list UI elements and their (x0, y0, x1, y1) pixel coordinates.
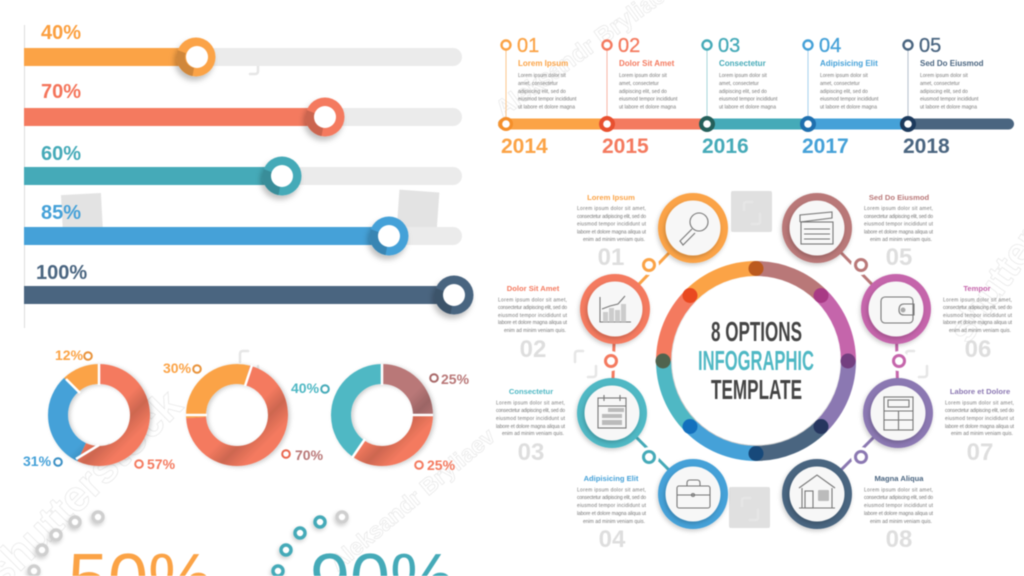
milestone 2018: 2018 (903, 135, 950, 158)
option 5: Sed Do Eiusmod (869, 193, 930, 202)
option 2: labore et dolore magna aliqua ut (498, 320, 568, 326)
dotted gauge 90% (273, 512, 454, 576)
milestone 2014: eiusmod tempor incididunt (518, 96, 577, 102)
8 options diagram (496, 193, 1015, 553)
option 7: consectetur adipiscing elit, sed do (945, 408, 1014, 414)
milestone 2015: ut labore et dolore magna (619, 104, 676, 110)
milestone 2015: Dolor Sit Amet (619, 59, 675, 68)
option 5: Lorem ipsum dolor sit amet, (864, 206, 933, 212)
donut 2 (163, 357, 324, 473)
milestone 2018: adipiscing elit, sed do (920, 89, 968, 95)
option 3: labore et dolore magna aliqua ut (496, 424, 566, 430)
milestone 2015: eiusmod tempor incididunt (619, 96, 678, 102)
milestone 2015: 2015 (602, 135, 649, 158)
option 2 (498, 274, 650, 363)
option 8: 08 (886, 526, 912, 553)
milestone 2015: 02 (618, 35, 640, 57)
icon: clapperboard (782, 193, 852, 263)
dotted gauge 50% (29, 512, 212, 576)
milestone 2017 (800, 35, 879, 158)
central title (698, 316, 814, 405)
milestone 2014 (499, 35, 577, 158)
milestone 2015: adipiscing elit, sed do (619, 89, 667, 95)
timeline bar (498, 118, 1014, 130)
option 8: consectetur adipiscing elit, sed do (864, 495, 933, 501)
option 2: enim ad minim veniam quis. (504, 328, 566, 334)
bar 70%: 70% (41, 81, 81, 103)
timeline panel (498, 35, 1014, 158)
milestone 2015: Lorem ipsum dolor sit (619, 73, 667, 79)
option 6: 06 (965, 336, 991, 363)
icon: wallet (861, 274, 931, 344)
option 8: eiusmod tempor incididunt ut (864, 503, 934, 509)
donut 3: 25% (441, 371, 470, 387)
bar 70% (24, 81, 462, 136)
option 5: enim ad minim veniam quis. (870, 237, 932, 243)
watermark: Aleksandr Bryliaev (325, 423, 500, 576)
icon: house (782, 459, 852, 529)
bar 100% (24, 262, 474, 314)
milestone 2014: adipiscing elit, sed do (518, 89, 566, 95)
milestone 2016 (699, 35, 778, 158)
option 2: eiusmod tempor incididunt ut (498, 313, 568, 319)
option 4 (577, 459, 728, 553)
milestone 2016: eiusmod tempor incididunt (719, 96, 778, 102)
milestone 2014: ut labore et dolore magna (518, 104, 575, 110)
option 4: labore et dolore magna aliqua ut (577, 511, 647, 517)
option 3 (496, 378, 647, 466)
milestone 2014: amet, consectetur (518, 81, 558, 87)
option 5: consectetur adipiscing elit, sed do (864, 214, 933, 220)
milestone 2016: 2016 (702, 135, 749, 158)
milestone 2017: amet, consectetur (820, 81, 860, 87)
milestone 2018 (900, 35, 984, 158)
milestone 2018: ut labore et dolore magna (920, 104, 977, 110)
milestone 2017: Lorem ipsum dolor sit (820, 73, 868, 79)
milestone 2016: adipiscing elit, sed do (719, 89, 767, 95)
option 7: Lorem ipsum dolor sit amet, (945, 400, 1014, 406)
option 3: consectetur adipiscing elit, sed do (496, 408, 565, 414)
milestone 2017: 04 (819, 35, 841, 57)
milestone 2015: amet, consectetur (619, 81, 659, 87)
option 6: Lorem ipsum dolor sit amet, (943, 298, 1012, 304)
milestone 2016: ut labore et dolore magna (719, 104, 776, 110)
icon: chart (580, 274, 650, 344)
milestone 2018: Lorem ipsum dolor sit (920, 73, 968, 79)
option 4: Lorem ipsum dolor sit amet, (577, 488, 646, 494)
milestone 2014: 01 (517, 35, 539, 57)
bar 60% (24, 143, 462, 196)
milestone 2017: adipiscing elit, sed do (820, 89, 868, 95)
donut 1: 12% (55, 347, 84, 363)
option 3: Consectetur (509, 387, 553, 396)
milestone 2017: Adipisicing Elit (820, 59, 878, 68)
option 3: 03 (518, 439, 544, 466)
milestone 2017: 2017 (802, 135, 849, 158)
bar 40%: 40% (41, 22, 81, 44)
milestone 2014: Lorem Ipsum (518, 59, 568, 68)
option 4: enim ad minim veniam quis. (583, 519, 645, 525)
option 1: enim ad minim veniam quis. (583, 237, 645, 243)
option 5: labore et dolore magna aliqua ut (864, 230, 934, 236)
milestone 2018: eiusmod tempor incididunt (920, 96, 979, 102)
milestone 2017: eiusmod tempor incididunt (820, 96, 879, 102)
milestone 2014: Lorem ipsum dolor sit (518, 73, 566, 79)
bar 60%: 60% (41, 143, 81, 165)
option 5: 05 (886, 244, 912, 271)
milestone 2015 (599, 35, 678, 158)
donut 2: 30% (163, 360, 192, 376)
donut 2: 70% (295, 447, 324, 463)
option 5: eiusmod tempor incididunt ut (864, 222, 934, 228)
option 2: 02 (520, 336, 546, 363)
option 4: eiusmod tempor incididunt ut (577, 503, 647, 509)
option 4: 04 (599, 526, 626, 553)
donut 3: 25% (427, 457, 456, 473)
option 5 (782, 193, 934, 271)
milestone 2018: 05 (919, 35, 941, 57)
bar 100%: 100% (36, 262, 87, 284)
option 6: enim ad minim veniam quis. (949, 328, 1011, 334)
donut 1 (23, 347, 176, 473)
milestone 2017: ut labore et dolore magna (820, 104, 877, 110)
central title: INFOGRAPHIC (698, 345, 814, 376)
option 3: eiusmod tempor incididunt ut (496, 416, 566, 422)
option 8: labore et dolore magna aliqua ut (864, 511, 934, 517)
option 7 (863, 378, 1015, 466)
option 6 (861, 274, 1013, 363)
option 7: 07 (967, 439, 993, 466)
donut 3 (291, 357, 470, 473)
central title: TEMPLATE (711, 374, 802, 405)
option 8: Lorem ipsum dolor sit amet, (864, 488, 933, 494)
option 7: enim ad minim veniam quis. (951, 431, 1013, 437)
icon: calculator (863, 378, 933, 448)
connectors (601, 228, 909, 494)
milestone 2018: Sed Do Eiusmod (920, 59, 984, 68)
option 1: Lorem Ipsum (587, 193, 635, 202)
donut 3: 40% (291, 380, 320, 396)
option 7: eiusmod tempor incididunt ut (945, 416, 1015, 422)
milestone 2014: 2014 (501, 135, 548, 158)
option 1: eiusmod tempor incididunt ut (577, 222, 647, 228)
central ring (625, 230, 887, 492)
option 4: consectetur adipiscing elit, sed do (577, 495, 646, 501)
option 7: Labore et Dolore (950, 387, 1010, 396)
milestone 2018: amet, consectetur (920, 81, 960, 87)
central title: 8 OPTIONS (711, 316, 802, 347)
option 7: labore et dolore magna aliqua ut (945, 424, 1015, 430)
option 1 (577, 193, 728, 271)
milestone 2016: Lorem ipsum dolor sit (719, 73, 767, 79)
option 6: consectetur adipiscing elit, sed do (943, 305, 1012, 311)
option 8: Magna Aliqua (874, 474, 924, 483)
option 1: Lorem ipsum dolor sit amet, (577, 206, 646, 212)
option 6: eiusmod tempor incididunt ut (943, 313, 1013, 319)
bar 40% (24, 22, 462, 76)
icon: briefcase (658, 459, 728, 529)
bar 85%: 85% (41, 202, 81, 224)
icon: calendar (577, 378, 647, 448)
option 2: Lorem ipsum dolor sit amet, (498, 298, 567, 304)
option 8 (782, 459, 934, 553)
option 3: Lorem ipsum dolor sit amet, (496, 400, 565, 406)
option 2: Dolor Sit Amet (507, 284, 560, 293)
option 1: 01 (598, 244, 624, 271)
option 6: labore et dolore magna aliqua ut (943, 320, 1013, 326)
milestone 2016: Consectetur (719, 59, 766, 68)
progress bars panel (24, 22, 474, 328)
milestone 2016: amet, consectetur (719, 81, 759, 87)
donut charts panel (23, 347, 470, 473)
option 2: consectetur adipiscing elit, sed do (498, 305, 567, 311)
donut 1: 57% (147, 456, 176, 472)
option 4: Adipisicing Elit (584, 474, 639, 483)
milestone 2016: 03 (718, 35, 740, 57)
option 6: Tempor (963, 284, 991, 293)
option 1: consectetur adipiscing elit, sed do (577, 214, 646, 220)
bar 85% (24, 202, 462, 256)
donut 1: 31% (23, 453, 52, 469)
option 3: enim ad minim veniam quis. (502, 431, 564, 437)
option 8: enim ad minim veniam quis. (870, 519, 932, 525)
icon: magnifier (658, 193, 728, 263)
option 1: labore et dolore magna aliqua ut (577, 230, 647, 236)
